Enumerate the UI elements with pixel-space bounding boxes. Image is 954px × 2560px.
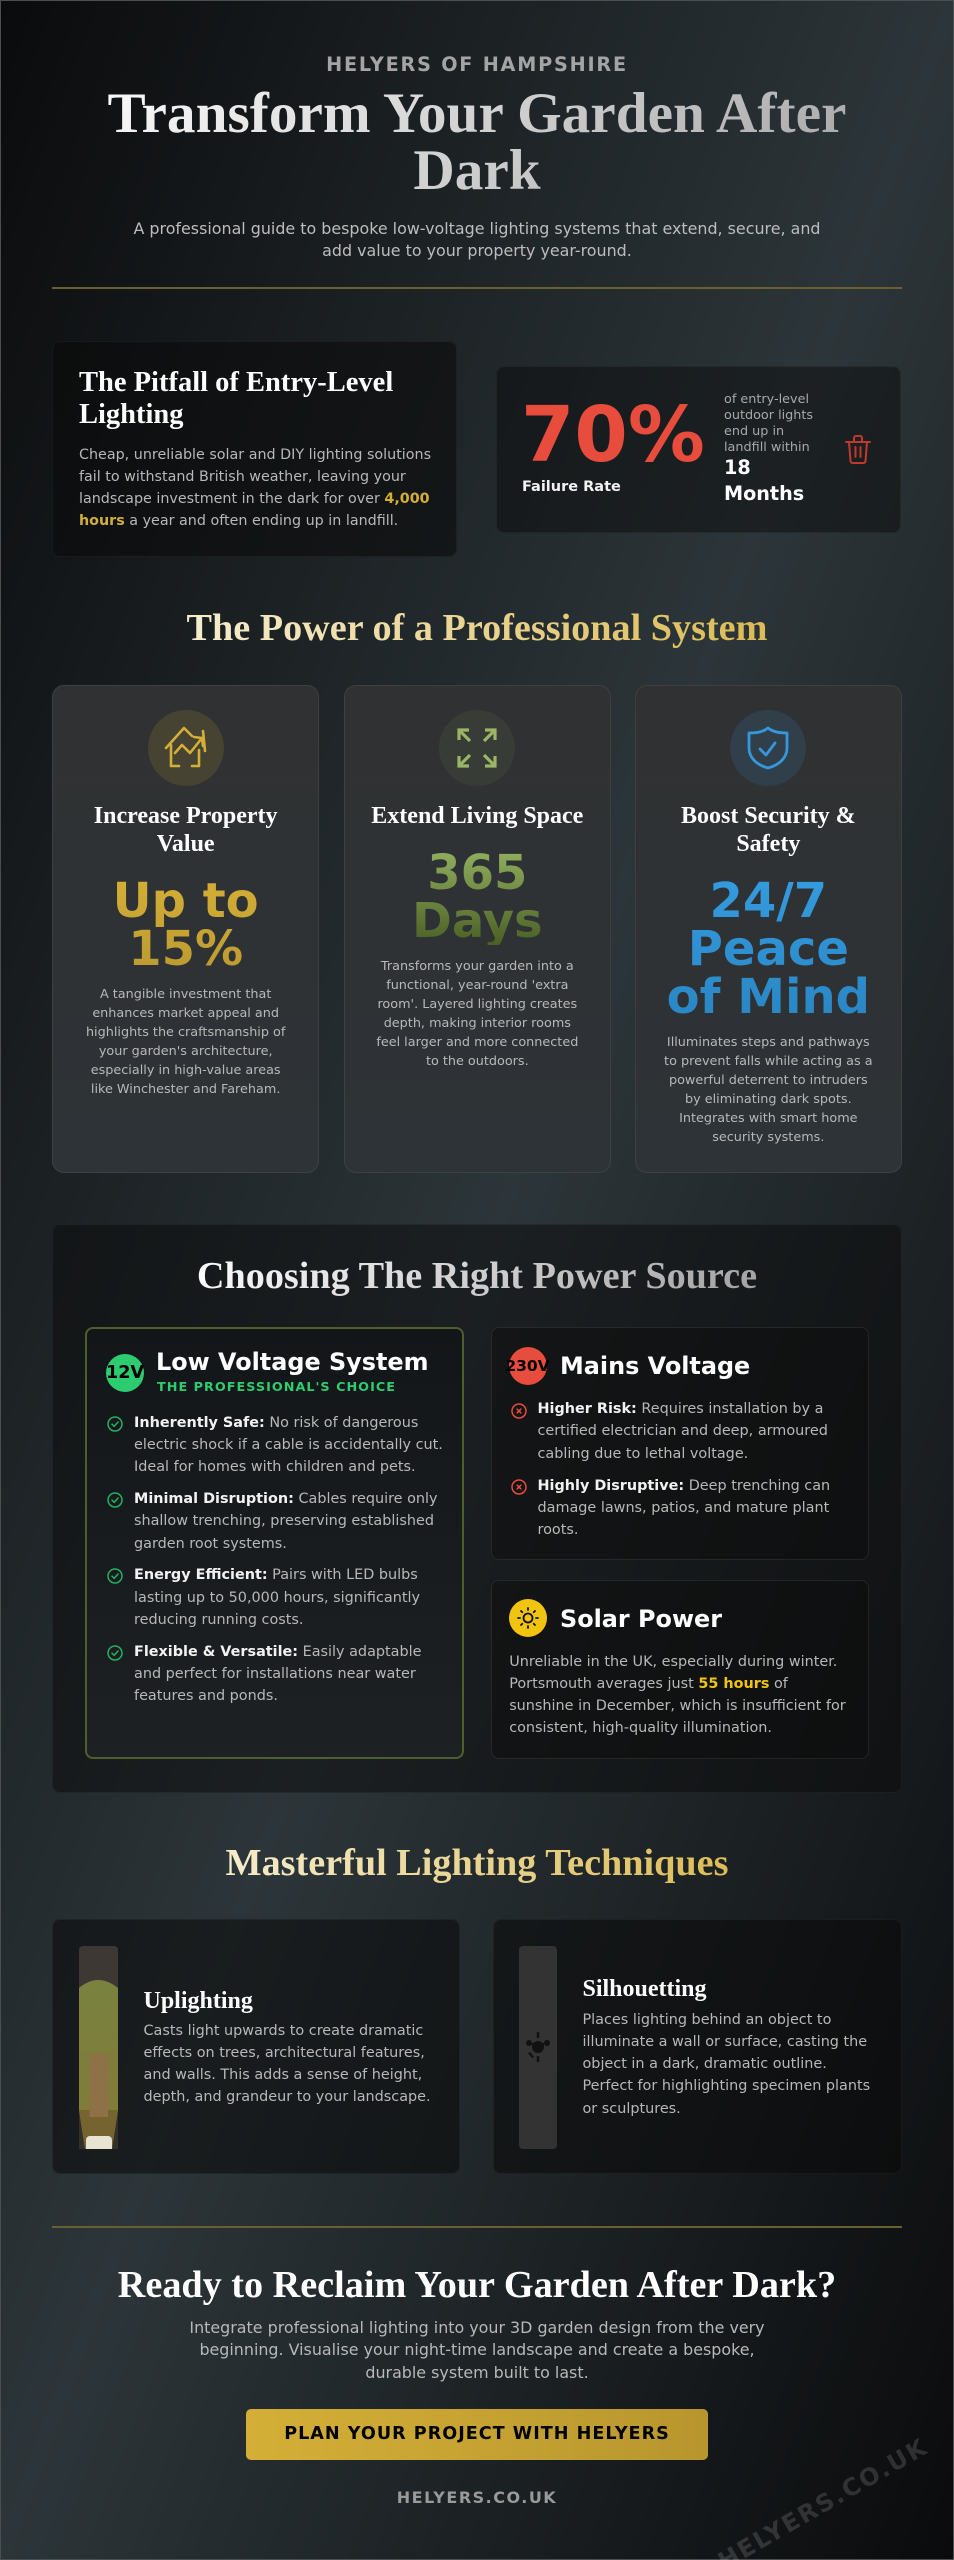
icon: house with rising chart: [148, 710, 224, 786]
pitfall body text: Cheap, unreliable solar and DIY lighting solutions: [79, 446, 431, 462]
subtitle: add value to your property year-round.: [322, 241, 632, 260]
card statistic: Peace: [688, 920, 849, 976]
list item: inherently safe: Inherently Safe: No risk of dangerous: [134, 1414, 418, 1430]
panel: increase property value: [52, 685, 319, 1173]
list item: higher risk: cabling due to lethal voltage.: [538, 1446, 748, 1462]
card description: functional, year-round 'extra: [386, 978, 568, 993]
footer website: HELYERS.CO.UK: [397, 2488, 557, 2507]
icon: expand arrows: [439, 710, 515, 786]
list item: minimal disruption: Minimal Disruption: Cables require only: [134, 1491, 438, 1507]
list item: energy efficient: Energy Efficient: Pairs with LED bulbs: [134, 1567, 418, 1583]
technique description: effects on trees, architectural features,: [144, 2045, 425, 2061]
stat description: outdoor lights: [724, 408, 813, 423]
list item: flexible and versatile: [134, 1644, 421, 1704]
pitfall heading: The Pitfall of Entry-Level: [79, 367, 393, 398]
technique description: [582, 2012, 870, 2117]
card description: A tangible investment that: [100, 987, 271, 1002]
badge: 12V: 12V: [106, 1363, 144, 1383]
technique description: Casts light upwards to create dramatic: [144, 2022, 423, 2038]
badge: 12V: [106, 1354, 144, 1392]
list item: highly disruptive: Highly Disruptive: Deep trenching can: [538, 1478, 830, 1494]
stat description: [724, 392, 813, 455]
pitfall body text: fail to withstand British weather, leaving your: [79, 469, 406, 485]
box heading: Low Voltage System: [156, 1348, 428, 1376]
card statistic: 24/7: [709, 872, 827, 928]
card statistic: 15%: [128, 920, 243, 976]
list item: higher risk: [538, 1401, 828, 1462]
list item: highly disruptive: [538, 1478, 830, 1538]
stat: 70%: 70%: [521, 391, 705, 480]
card description: [664, 1035, 873, 1145]
subtitle: A professional guide to bespoke low-voltage lighting systems that extend, secure, and: [134, 219, 820, 238]
technique description: and walls. This adds a sense of height,: [144, 2067, 422, 2083]
technique description: object in a dark, dramatic outline.: [582, 2056, 827, 2072]
solar body text: Portsmouth averages just 55 hours of: [509, 1676, 788, 1692]
list item: minimal disruption: garden root systems.: [134, 1536, 287, 1552]
list item: flexible and versatile: Flexible & Versatile: Easily adaptable: [134, 1644, 421, 1660]
call to action description: durable system built to last.: [365, 2363, 589, 2382]
solar body text: Unreliable in the UK, especially during winter.: [509, 1654, 837, 1670]
icon: check: [107, 1568, 123, 1584]
list item: flexible and versatile: features and ponds.: [134, 1688, 278, 1704]
card statistic: Days: [412, 893, 543, 949]
technique description: illuminate a wall or surface, casting the: [582, 2034, 867, 2050]
panel: pitfall of entry-level lighting: [52, 341, 457, 557]
badge: sun icon: [508, 1599, 546, 1637]
card description: Integrates with smart home: [679, 1111, 858, 1126]
technique description: or sculptures.: [582, 2101, 681, 2117]
technique description: Places lighting behind an object to: [582, 2012, 831, 2028]
subtitle: [134, 219, 820, 260]
technique description: Perfect for highlighting specimen plants: [582, 2078, 870, 2094]
card statistic: [344, 849, 611, 945]
technique description: [144, 2022, 431, 2105]
list item: flexible and versatile: and perfect for installations near water: [134, 1666, 416, 1682]
card description: room'. Layered lighting creates: [377, 997, 577, 1012]
card description: to prevent falls while acting as a: [664, 1054, 873, 1069]
card statistic: [52, 876, 319, 972]
card title: Value: [157, 831, 215, 857]
icon: check: [107, 1645, 123, 1661]
panel: extend living space: [344, 685, 611, 1173]
card title: [94, 803, 278, 857]
card description: especially in high-value areas: [91, 1063, 281, 1078]
panel: silhouetting: [493, 1919, 902, 2174]
heading: Choosing The Right Power Source: [197, 1255, 757, 1297]
list item: energy efficient: reducing running costs.: [134, 1612, 303, 1628]
card description: powerful deterrent to intruders: [669, 1073, 868, 1088]
card description: depth, making interior rooms: [384, 1016, 571, 1031]
icon: check: [107, 1416, 123, 1432]
list item: higher risk: certified electrician and deep, armoured: [538, 1423, 828, 1439]
icon: check: [107, 1492, 123, 1508]
card description: [376, 958, 578, 1069]
badge: 230V: [508, 1347, 546, 1385]
card description: highlights the craftsmanship of: [86, 1025, 285, 1040]
list item: highly disruptive: roots.: [538, 1522, 578, 1538]
panel: choosing the right power source: [52, 1224, 902, 1793]
card description: [86, 987, 286, 1097]
list item: inherently safe: electric shock if a cable is accidentally cut.: [134, 1437, 443, 1453]
title: Dark: [413, 139, 541, 202]
card title: Safety: [736, 831, 800, 857]
call to action heading: Ready to Reclaim Your Garden After Dark?: [118, 2264, 836, 2306]
card statistic: Up to: [113, 872, 259, 928]
solar body text: consistent, high-quality illumination.: [509, 1720, 772, 1736]
card title: Increase Property: [94, 803, 278, 829]
box: mains voltage: [490, 1327, 868, 1560]
list item: highly disruptive: damage lawns, patios, and mature plant: [538, 1500, 829, 1516]
technique title: Uplighting: [144, 1988, 253, 2014]
icon: cross: [511, 1479, 527, 1495]
list item: energy efficient: [134, 1567, 420, 1628]
diagram: silhouette of plant against wall: [519, 1946, 557, 2149]
call to action description: beginning. Visualise your night-time landscape and create a bespoke,: [199, 2340, 755, 2359]
diagram: uplighting beam on tree: [79, 1946, 118, 2149]
badge: 230V: 230V: [505, 1357, 550, 1375]
stat label: failure rate: Failure Rate: [522, 479, 621, 495]
card description: Transforms your garden into a: [381, 958, 574, 974]
card statistic: [635, 876, 902, 1020]
pitfall body text: [79, 446, 431, 529]
solar body text: sunshine in December, which is insufficient for: [509, 1698, 846, 1714]
card description: your garden's architecture,: [99, 1044, 273, 1059]
call to action description: Integrate professional lighting into your 3D garden design from the very: [189, 2318, 765, 2337]
solar body text: [509, 1654, 846, 1736]
box heading: Solar Power: [560, 1605, 722, 1633]
call to action button: PLAN YOUR PROJECT WITH HELYERS: [284, 2424, 670, 2444]
icon: shield with check: [730, 710, 806, 786]
card description: feel larger and more connected: [376, 1035, 578, 1050]
call to action description: [189, 2318, 765, 2382]
technique title: Silhouetting: [582, 1976, 707, 2002]
title: Transform Your Garden After: [108, 82, 846, 144]
pitfall body text: hours a year and often ending up in landfill.: [79, 513, 398, 529]
list item: higher risk: Higher Risk: Requires installation by a: [538, 1401, 823, 1417]
card description: security systems.: [712, 1130, 824, 1145]
card statistic: 365: [427, 845, 527, 901]
list item: minimal disruption: [134, 1491, 438, 1552]
stat: 18 months: Months: [724, 482, 804, 505]
eyebrow: brand name: HELYERS OF HAMPSHIRE: [326, 53, 628, 76]
icon: cross: [511, 1403, 527, 1419]
card title: [681, 803, 856, 857]
technique description: depth, and grandeur to your landscape.: [144, 2089, 431, 2105]
card description: enhances market appeal and: [92, 1006, 279, 1021]
card description: like Winchester and Fareham.: [91, 1082, 280, 1097]
list item: inherently safe: [134, 1414, 443, 1475]
card title: Boost Security &: [681, 803, 856, 829]
panel: boost security and safety: [635, 685, 902, 1173]
title: [52, 84, 902, 200]
box heading: Mains Voltage: [560, 1352, 750, 1380]
box: solar power: [490, 1580, 868, 1759]
stat: 18 months: 18: [724, 456, 751, 479]
stat: 18 months: [724, 456, 804, 505]
card description: by eliminating dark spots.: [685, 1092, 852, 1107]
card title: Extend Living Space: [371, 803, 583, 829]
box subheading: THE PROFESSIONAL'S CHOICE: [157, 1380, 396, 1395]
stat description: end up in: [724, 424, 784, 439]
panel: failure rate statistic: [496, 366, 901, 533]
list item: energy efficient: lasting up to 50,000 hours, significantly: [134, 1590, 420, 1606]
panel: uplighting: [52, 1919, 460, 2174]
heading: the power of a professional system: The Power of a Professional System: [187, 607, 767, 649]
list item: inherently safe: Ideal for homes with children and pets.: [134, 1459, 416, 1475]
card statistic: of Mind: [667, 968, 870, 1024]
card description: to the outdoors.: [426, 1054, 529, 1069]
box: low voltage system: [85, 1327, 464, 1759]
call to action button: [246, 2409, 708, 2460]
icon: trash can: [845, 435, 871, 464]
stat description: of entry-level: [724, 392, 809, 407]
list item: minimal disruption: shallow trenching, preserving established: [134, 1513, 434, 1529]
pitfall heading: [79, 367, 393, 430]
pitfall body text: landscape investment in the dark for over 4,000: [79, 491, 430, 507]
pitfall heading: Lighting: [79, 399, 184, 430]
heading: masterful lighting techniques: Masterful Lighting Techniques: [226, 1842, 728, 1884]
stat description: landfill within: [724, 440, 810, 455]
card description: Illuminates steps and pathways: [667, 1035, 870, 1050]
